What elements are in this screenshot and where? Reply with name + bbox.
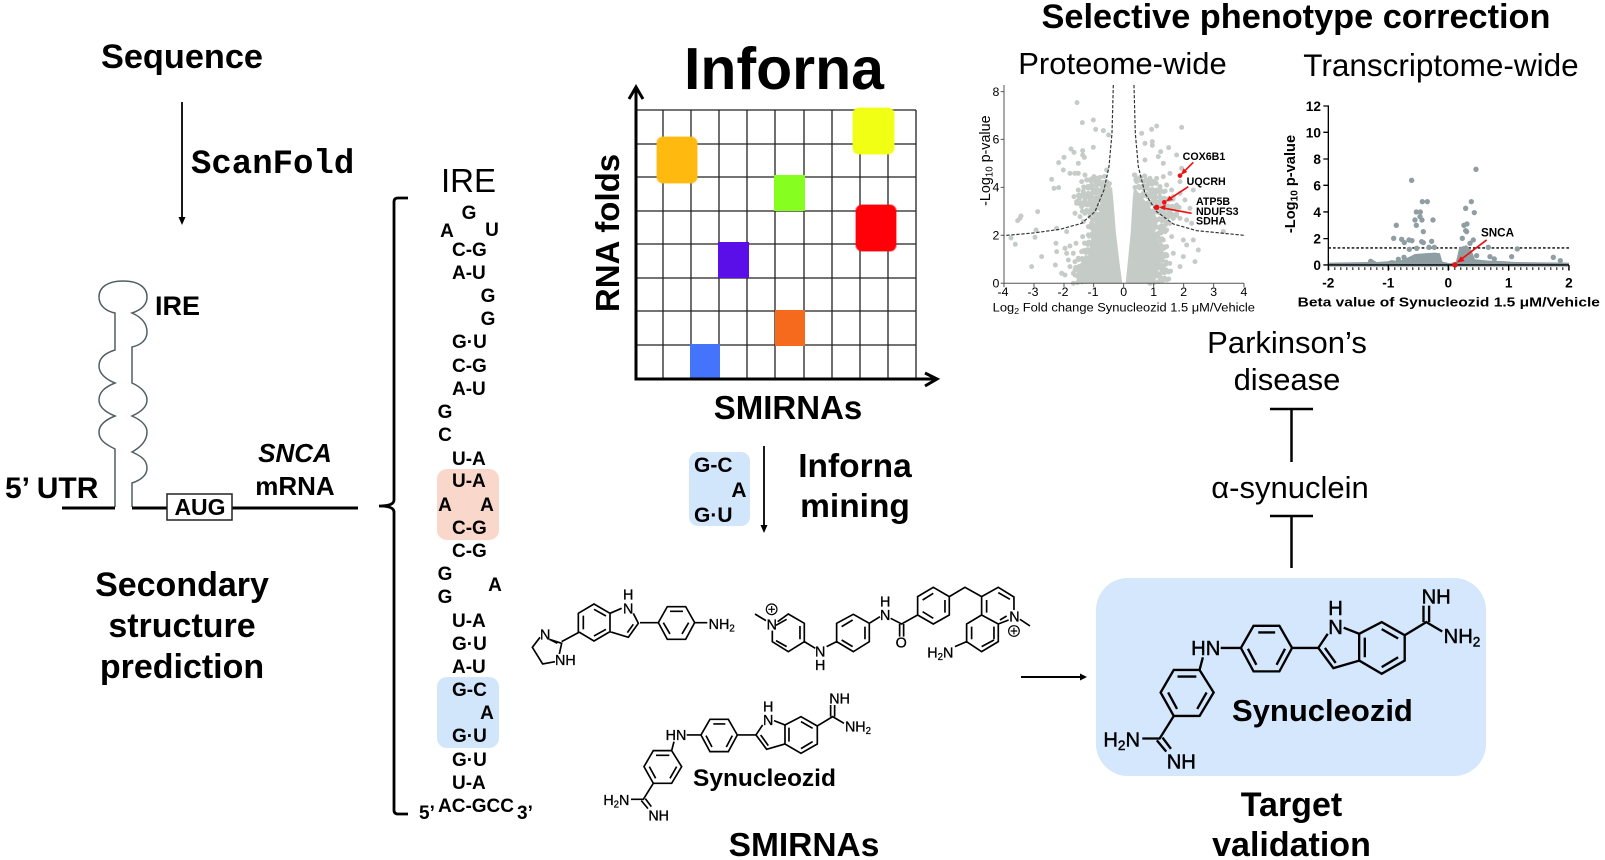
protein labels: SDHA xyxy=(1196,215,1226,227)
subheading: Proteome-wide: Proteome-wide xyxy=(1018,46,1227,81)
x axis label: Log xyxy=(993,301,1013,315)
RNA secondary structure letters xyxy=(419,203,533,824)
title: Inforna: Inforna xyxy=(684,36,885,102)
y axis label: p-value xyxy=(1283,135,1299,190)
RNA secondary structure letters: U-A xyxy=(452,471,486,492)
molecule: pyridinium quinolinium compound xyxy=(755,587,1030,674)
label: Synucleozid large: Synucleozid xyxy=(1232,693,1413,728)
arrow: Inforna mining xyxy=(760,446,768,533)
RNA secondary structure letters: U-A xyxy=(452,449,486,470)
RNA secondary structure letters: 5’ xyxy=(419,803,435,824)
mRNA line xyxy=(62,506,358,510)
panel: Synucleozid target validation xyxy=(1096,578,1486,776)
molecule: Synucleozid large: 2 xyxy=(1473,634,1480,649)
y tick labels: 0 xyxy=(992,276,999,290)
molecule: Synucleozid small: HN xyxy=(666,728,686,744)
heading: Sequence: Sequence xyxy=(101,38,263,76)
molecule: pyridinium quinolinium compound: N xyxy=(943,646,953,662)
highlight: blue bulge xyxy=(437,677,499,748)
highlighted red points and arrows xyxy=(1154,162,1193,213)
x tick labels: -4 xyxy=(998,285,1009,299)
x tick labels: -3 xyxy=(1028,285,1039,299)
label: SNCA mRNA xyxy=(255,438,335,501)
molecule: Synucleozid large xyxy=(1103,586,1480,774)
x tick labels: 0 xyxy=(1120,285,1127,299)
heading: Target validation: Target xyxy=(1241,786,1342,824)
protein labels xyxy=(1183,151,1239,227)
RNA secondary structure letters: C xyxy=(438,425,452,446)
molecule: Synucleozid small: 2 xyxy=(866,726,871,737)
RNA secondary structure letters: A xyxy=(440,221,454,242)
label: SNCA: SNCA xyxy=(1481,227,1515,240)
y axis label: -Log xyxy=(1283,201,1299,233)
hairpin outline xyxy=(99,281,147,507)
RNA secondary structure letters: G·U xyxy=(452,332,487,353)
molecule: Synucleozid large: NH xyxy=(1444,626,1473,648)
molecule: Synucleozid small: N xyxy=(763,713,773,729)
RNA secondary structure letters: A xyxy=(480,703,494,724)
y tick labels: 4 xyxy=(992,181,999,195)
arrow: sequence to structure xyxy=(178,102,186,225)
x tick labels: 0 xyxy=(1445,275,1453,290)
RNA secondary structure letters: C-G xyxy=(452,541,487,562)
y tick labels xyxy=(1306,99,1321,273)
y tick labels: 12 xyxy=(1306,99,1321,114)
significance curves xyxy=(1003,85,1244,236)
x axis label: Beta value of Synucleozid 1.5 μM/Vehicle xyxy=(1298,296,1600,310)
y axis label: p-value xyxy=(978,115,994,166)
cloud fringe points xyxy=(1073,175,1180,283)
RNA secondary structure letters: C-G xyxy=(452,356,487,377)
RNA secondary structure letters: U-A xyxy=(452,773,486,794)
molecule: Synucleozid large: HN xyxy=(1191,638,1220,660)
molecule: indole with imidazoline: N xyxy=(623,601,633,617)
molecule: Synucleozid large: N xyxy=(1126,729,1140,751)
molecule: Synucleozid small: NH xyxy=(845,720,866,736)
label: IRE: IRE xyxy=(155,291,200,321)
motif box: G-C A G·U xyxy=(689,452,750,527)
label: Inforna mining: Inforna xyxy=(798,448,912,485)
RNA secondary structure letters: A xyxy=(438,495,452,516)
motif box: G-C A G·U: G-C xyxy=(694,454,732,477)
RNA secondary structure letters: 3’ xyxy=(517,803,533,824)
protein labels: NDUFS3 xyxy=(1196,206,1239,218)
y tick labels: 2 xyxy=(1313,232,1321,247)
RNA secondary structure letters: G xyxy=(462,203,476,224)
y tick labels: 8 xyxy=(1313,152,1321,167)
RNA secondary structure letters: G xyxy=(481,286,495,307)
RNA secondary structure letters: A-U xyxy=(452,263,486,284)
heading: IRE: IRE xyxy=(441,162,496,199)
molecule: pyridinium quinolinium compound: 2 xyxy=(938,652,943,663)
molecule: Synucleozid large: NH xyxy=(1167,752,1196,774)
molecule: pyridinium quinolinium compound: N xyxy=(767,617,777,633)
molecule: Synucleozid large: NH xyxy=(1422,586,1451,608)
label: Synucleozid small: Synucleozid xyxy=(693,765,836,792)
molecule: pyridinium quinolinium compound: N xyxy=(880,608,890,624)
y tick labels: 4 xyxy=(1313,205,1321,220)
RNA secondary structure letters: A xyxy=(480,495,494,516)
y tick labels: 0 xyxy=(1313,258,1321,273)
highlight: pink internal loop xyxy=(437,469,499,540)
diagram: SNCA mRNA hairpin xyxy=(5,281,358,520)
chart: RNA folds vs SMIRNAs matrix xyxy=(629,87,937,386)
molecule: Synucleozid small: N xyxy=(619,793,629,809)
bracket xyxy=(379,198,408,814)
protein labels: ATP5B xyxy=(1196,196,1230,208)
molecule: indole with imidazoline: NH xyxy=(555,653,576,669)
molecule: Synucleozid small: NH xyxy=(829,691,850,707)
heading: Secondary structure prediction: prediction xyxy=(100,648,264,686)
heading: Secondary structure prediction: structure xyxy=(108,607,256,645)
subheading: Transcriptome-wide: Transcriptome-wide xyxy=(1303,47,1579,83)
heading: Secondary structure prediction: Secondary xyxy=(95,566,269,604)
RNA secondary structure letters: G·U xyxy=(452,726,487,747)
molecule: Synucleozid small xyxy=(603,691,871,825)
RNA secondary structure letters: G·U xyxy=(452,750,487,771)
chart: transcriptome volcano plot xyxy=(1283,99,1600,310)
label: SNCA mRNA: mRNA xyxy=(255,471,335,501)
molecule: pyridinium quinolinium compound: H xyxy=(927,646,938,662)
molecule: indole with imidazoline: H xyxy=(623,587,633,603)
colored squares xyxy=(657,108,896,379)
y axis label: 10 xyxy=(984,166,995,177)
molecule: Synucleozid large: 2 xyxy=(1118,738,1126,753)
label: 5' UTR: 5’ UTR xyxy=(5,472,99,505)
motif box: G-C A G·U: A xyxy=(731,479,747,502)
RNA secondary structure letters: AC-GCC xyxy=(438,796,514,817)
protein labels: COX6B1 xyxy=(1183,151,1225,163)
dense points xyxy=(1077,187,1162,283)
chart: proteome volcano plot xyxy=(978,85,1255,316)
RNA secondary structure letters: G xyxy=(438,587,452,608)
y axis label: -Log xyxy=(978,177,994,206)
label: ScanFold: ScanFold xyxy=(191,146,354,184)
RNA secondary structure letters: G xyxy=(438,564,452,585)
RNA secondary structure letters: A xyxy=(488,575,502,596)
x tick labels: 2 xyxy=(1565,275,1573,290)
heading: Target validation xyxy=(1212,786,1371,860)
x tick labels: -2 xyxy=(1322,275,1335,290)
RNA secondary structure letters: C-G xyxy=(452,518,487,539)
motif box: G-C A G·U: G·U xyxy=(694,504,732,527)
label: Inforna mining xyxy=(798,448,912,525)
x tick labels: -2 xyxy=(1058,285,1069,299)
heading: Secondary structure prediction xyxy=(95,566,269,686)
threshold line xyxy=(1328,246,1571,250)
y tick labels: 6 xyxy=(992,133,999,147)
label: Inforna mining: mining xyxy=(800,488,910,525)
molecule: Synucleozid large: N xyxy=(1328,617,1343,639)
RNA secondary structure letters: G xyxy=(438,402,452,423)
label: Parkinson's disease xyxy=(1207,325,1367,397)
RNA secondary structure letters: G·U xyxy=(452,634,487,655)
x tick labels: 2 xyxy=(1180,285,1187,299)
AUG box: AUG xyxy=(174,494,226,520)
RNA secondary structure letters: A-U xyxy=(452,657,486,678)
molecule: Synucleozid small: H xyxy=(763,700,773,716)
x tick labels: 4 xyxy=(1241,285,1248,299)
label: Parkinson's disease: Parkinson’s xyxy=(1207,325,1367,360)
molecule: indole with imidazoline: 2 xyxy=(729,623,735,634)
molecule: Synucleozid small: NH xyxy=(648,809,669,825)
inhibition bar: alpha-synuclein to disease xyxy=(1270,409,1313,462)
RNA secondary structure letters: C-G xyxy=(452,240,487,261)
molecule: pyridinium quinolinium compound: O xyxy=(896,636,907,652)
dense points baseline and humps xyxy=(1328,245,1569,267)
label: SNCA mRNA: SNCA xyxy=(258,438,332,468)
RNA secondary structure letters: A-U xyxy=(452,379,486,400)
axis label: RNA folds: RNA folds xyxy=(589,154,626,312)
label: Parkinson's disease: disease xyxy=(1234,362,1340,397)
x tick labels: 1 xyxy=(1150,285,1157,299)
molecule: indole with imidazoline xyxy=(532,587,735,669)
molecule: Synucleozid large: H xyxy=(1328,598,1343,620)
y tick labels: 2 xyxy=(992,229,999,243)
molecule: pyridinium quinolinium compound: N xyxy=(1009,609,1020,625)
x tick labels: 1 xyxy=(1505,275,1513,290)
scattered points xyxy=(1011,103,1223,280)
grid xyxy=(637,110,916,379)
y axis label: 10 xyxy=(1289,190,1300,201)
molecule: Synucleozid large: H xyxy=(1103,729,1118,751)
molecule: pyridinium quinolinium compound: H xyxy=(880,595,890,611)
RNA secondary structure letters: U-A xyxy=(452,611,486,632)
x axis label: 2 xyxy=(1014,306,1019,316)
y tick labels: 6 xyxy=(1313,178,1321,193)
scattered points xyxy=(1371,169,1560,261)
RNA secondary structure letters: G xyxy=(481,309,495,330)
y tick labels xyxy=(992,85,999,290)
axes xyxy=(629,87,937,386)
x tick labels xyxy=(998,285,1248,299)
axes xyxy=(1001,85,1244,287)
y tick labels: 10 xyxy=(1306,125,1321,140)
x axis label: Fold change Synucleozid 1.5 μM/Vehicle xyxy=(1019,301,1255,315)
protein labels: UQCRH xyxy=(1187,176,1226,188)
x tick labels: -1 xyxy=(1088,285,1099,299)
molecule: pyridinium quinolinium compound: H xyxy=(815,658,825,674)
arrow: to target validation xyxy=(1021,674,1087,680)
label: alpha-synuclein: α-synuclein xyxy=(1211,470,1369,505)
inhibition bar: Synucleozid to alpha-synuclein xyxy=(1270,516,1313,568)
axes xyxy=(1323,105,1569,271)
x tick labels xyxy=(1322,275,1573,290)
RNA secondary structure letters: G-C xyxy=(452,680,487,701)
molecule: pyridinium quinolinium compound: N xyxy=(815,645,825,661)
x tick labels: 3 xyxy=(1210,285,1217,299)
molecule: Synucleozid small: H xyxy=(603,793,614,809)
RNA secondary structure letters: U xyxy=(485,220,499,241)
molecule: indole with imidazoline: NH xyxy=(709,617,729,633)
SNCA point and arrow xyxy=(1452,240,1487,268)
x tick labels: -1 xyxy=(1382,275,1395,290)
molecule: indole with imidazoline: N xyxy=(540,627,550,643)
axis label: SMIRNAs: SMIRNAs xyxy=(714,389,862,426)
molecule: Synucleozid small: 2 xyxy=(614,799,619,810)
y tick labels: 8 xyxy=(992,85,999,99)
